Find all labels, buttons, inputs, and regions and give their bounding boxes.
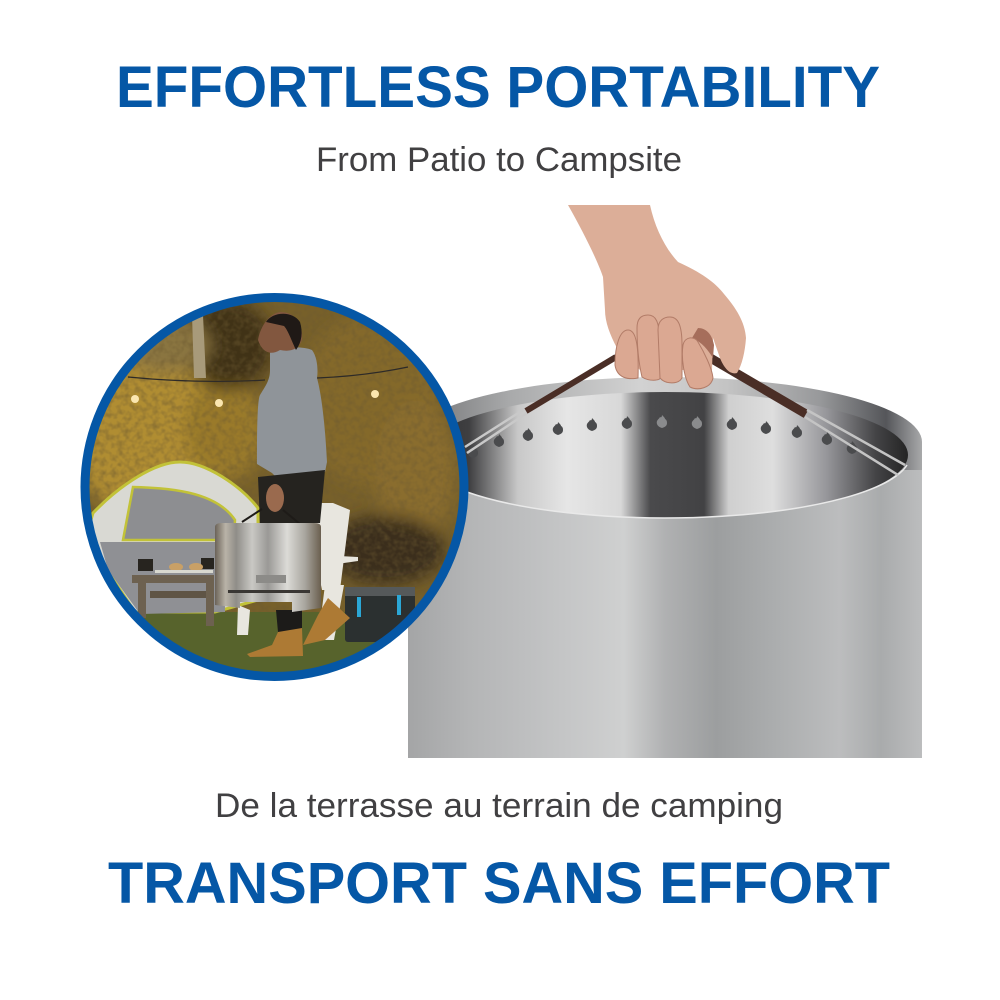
hand xyxy=(266,484,284,512)
product: fire pit held by a hand xyxy=(408,205,922,758)
trousers xyxy=(258,470,325,523)
inset photo: man carrying fire pit at campsite xyxy=(75,290,470,690)
tent xyxy=(88,462,258,614)
fire pit interior xyxy=(422,392,908,518)
hand and wrist xyxy=(568,205,746,389)
carry handle xyxy=(465,356,905,475)
knuckle crease shadow xyxy=(692,328,714,358)
hood and sweatshirt xyxy=(257,347,327,483)
hair xyxy=(266,314,302,350)
interior front edge highlight xyxy=(467,465,907,518)
head xyxy=(258,312,302,353)
title: french heading: TRANSPORT SANS EFFORT xyxy=(108,851,890,916)
tree trunk xyxy=(192,315,206,378)
fire pit outer body xyxy=(408,442,922,758)
blue circle border xyxy=(85,298,464,676)
small fire pit xyxy=(215,523,321,612)
wrist and back of hand xyxy=(568,205,746,373)
adirondack chair xyxy=(237,500,358,640)
boots xyxy=(247,628,303,657)
fire pit rim xyxy=(408,377,922,470)
subtitle: french: De la terrasse au terrain de camping xyxy=(215,787,783,825)
fingers xyxy=(615,315,713,389)
ground xyxy=(144,612,375,672)
man xyxy=(242,312,350,657)
cooler xyxy=(345,587,415,642)
table with food xyxy=(132,558,214,626)
subtitle: english: From Patio to Campsite xyxy=(316,141,682,179)
handle xyxy=(242,510,297,523)
flame cut-outs row xyxy=(468,415,857,458)
forest background xyxy=(90,302,460,612)
title: english heading: EFFORTLESS PORTABILITY xyxy=(116,55,880,120)
string lights xyxy=(128,367,408,407)
